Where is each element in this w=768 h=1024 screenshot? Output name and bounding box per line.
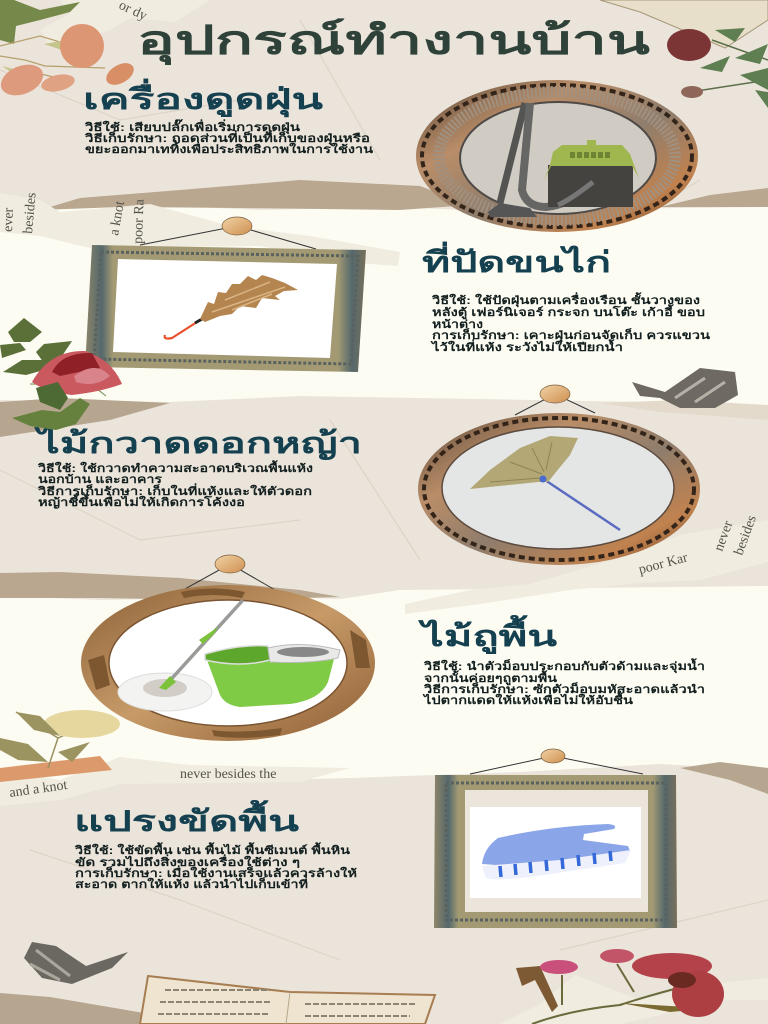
paper scrap: newspaper right: never <box>712 519 737 553</box>
body text: vacuum cleaner: วิธีเก็บรักษา: ถอดส่วนที่เป็นที่เก็บของฝุ่นหรือ <box>84 130 370 146</box>
band: torn cream paper 1 <box>0 180 768 437</box>
paper scrap: newspaper lower left <box>0 757 350 806</box>
section: floor brush text <box>74 799 357 891</box>
icon: scrub brush <box>482 824 631 879</box>
oval frame: grass broom <box>418 413 700 565</box>
paper scrap: orange strip <box>0 756 112 782</box>
body text: floor brush: การเก็บรักษา: เมื่อใช้งานเสร็จแล้วควรล้างให้ <box>75 865 357 880</box>
paper scrap: newspaper left: poor Ra <box>131 198 148 244</box>
paper scrap: newspaper left <box>0 192 400 266</box>
section: vacuum cleaner text <box>83 78 374 156</box>
icon: mop and bucket <box>118 600 340 711</box>
body text: vacuum cleaner: วิธีใช้: เสียบปลั๊กเพื่อเริ่มการดูดฝุ่น <box>84 119 301 135</box>
body text: mop: จากนั้นค่อยๆถูตามพื้น <box>424 670 558 686</box>
body text: grass broom: วิธีใช้: ใช้กวาดทำความสะอาดบริเวณพื้นแห้ง <box>37 460 313 475</box>
oval frame: mop <box>81 585 375 741</box>
pin and strings: frame 2 <box>140 217 316 249</box>
icon: feather duster <box>165 275 298 339</box>
paper scrap: newspaper left: a knot <box>107 200 128 237</box>
body text: mop: วิธีการเก็บรักษา: ซักตัวม็อบมหัสะอาดแล้วนำ <box>423 682 705 696</box>
body text: grass broom: นอกบ้าน และอาคาร <box>38 473 162 486</box>
body text: floor brush: วิธีใช้: ใช้ขัดพื้น เช่น พื้นไม้ พื้นซีเมนต์ พื้นหิน <box>74 842 351 857</box>
body text: vacuum cleaner <box>84 119 374 156</box>
heading: mop: ไม้ถูพื้น <box>418 614 557 654</box>
body text: floor brush: สะอาด ตากให้แห้ง แล้วนำไปเก็บเข้าที่ <box>75 876 308 891</box>
paper scrap: newspaper left: ever <box>1 207 17 232</box>
body text: feather duster: วิธีใช้: ใช้ปัดฝุ่นตามเครื่องเรือน ชั้นวางของ <box>431 292 700 308</box>
heading: grass broom: ไม้กวาดดอกหญ้า <box>34 426 362 461</box>
paper scrap: newspaper right <box>405 514 768 614</box>
decoration: moth bottom left <box>24 942 128 984</box>
body text: grass broom <box>37 460 313 509</box>
body text: feather duster: ไว้ในที่แห้ง ระวังไม่ให้เปียกน้ำ <box>429 339 623 354</box>
section: grass broom text <box>34 426 362 509</box>
pin and strings: frame 3 <box>515 385 595 415</box>
band: torn cream paper 2 <box>0 572 768 794</box>
pin and strings: frame 4 <box>183 555 277 591</box>
decoration: yellow flowers left <box>0 710 120 768</box>
heading: feather duster: ที่ปัดขนไก่ <box>422 241 611 279</box>
body text: floor brush <box>74 842 357 891</box>
body text: mop: ไปตากแดดให้แห้งเพื่อไม่ให้อับชื้น <box>421 692 634 707</box>
decoration: butterfly right <box>632 368 738 408</box>
body text: feather duster <box>429 292 711 354</box>
paper scrap: newspaper right: besides <box>732 514 760 557</box>
decoration: torn brown bottom left <box>0 993 170 1024</box>
decoration: rose with leaves left <box>0 318 122 430</box>
body text: grass broom: วิธีการเก็บรักษา: เก็บในที่แห้งและให้ตัวดอก <box>37 483 312 498</box>
body text: vacuum cleaner: ขยะออกมาเททิ้งเพื่อประสิทธิภาพในการใช้งาน <box>85 141 374 156</box>
rectangular frame: feather duster <box>85 245 366 372</box>
paper scrap: newspaper lower left: and a knot <box>8 778 68 801</box>
paper scrap: newspaper left: besides <box>21 192 40 234</box>
decoration: open book bottom <box>140 976 435 1024</box>
oval frame: vacuum cleaner <box>416 80 698 232</box>
icon: vacuum cleaner <box>488 103 639 217</box>
paper scrap: newspaper top left <box>40 0 210 46</box>
decoration: red flowers bottom right <box>516 949 724 1024</box>
body text: mop <box>421 658 705 707</box>
body text: mop: วิธีใช้: นำตัวม็อบประกอบกับตัวด้ามและจุ่มน้ำ <box>423 658 705 674</box>
decoration: open book top right <box>600 0 768 48</box>
title: อุปกรณ์ทำงานบ้าน <box>137 18 650 66</box>
decoration: top-left leaves and flowers <box>0 0 137 101</box>
section: feather duster text <box>422 241 711 354</box>
icon: grass broom <box>470 436 620 530</box>
section: mop text <box>418 614 705 707</box>
body text: grass broom: หญ้าชี้ขึ้นเพื่อไม่ให้เกิดการโค้งงอ <box>38 494 245 509</box>
heading: vacuum cleaner: เครื่องดูดฝุ่น <box>83 78 323 117</box>
decoration: newspaper scrap bottom right <box>500 975 768 1024</box>
body text: feather duster: การเก็บรักษา: เคาะฝุ่นก่อนจัดเก็บ ควรแขวน <box>432 328 711 343</box>
pin and strings: frame 5 <box>470 749 643 774</box>
body text: floor brush: ขัด รวมไปถึงสิ่งของเครื่องใช้ต่าง ๆ <box>75 854 300 869</box>
body text: feather duster: หลังตู้ เฟอร์นิเจอร์ กระจก บนโต๊ะ เก้าอี้ ขอบ <box>432 304 705 320</box>
paper scrap: newspaper lower left: never besides the <box>180 767 276 782</box>
decoration: top-right rose and leaves <box>667 28 768 108</box>
rectangular frame: floor brush <box>434 775 677 928</box>
heading: floor brush: แปรงขัดพื้น <box>74 799 299 838</box>
paper scrap: newspaper right: poor Kar <box>637 550 690 578</box>
body text: feather duster: หน้าต่าง <box>432 318 483 331</box>
